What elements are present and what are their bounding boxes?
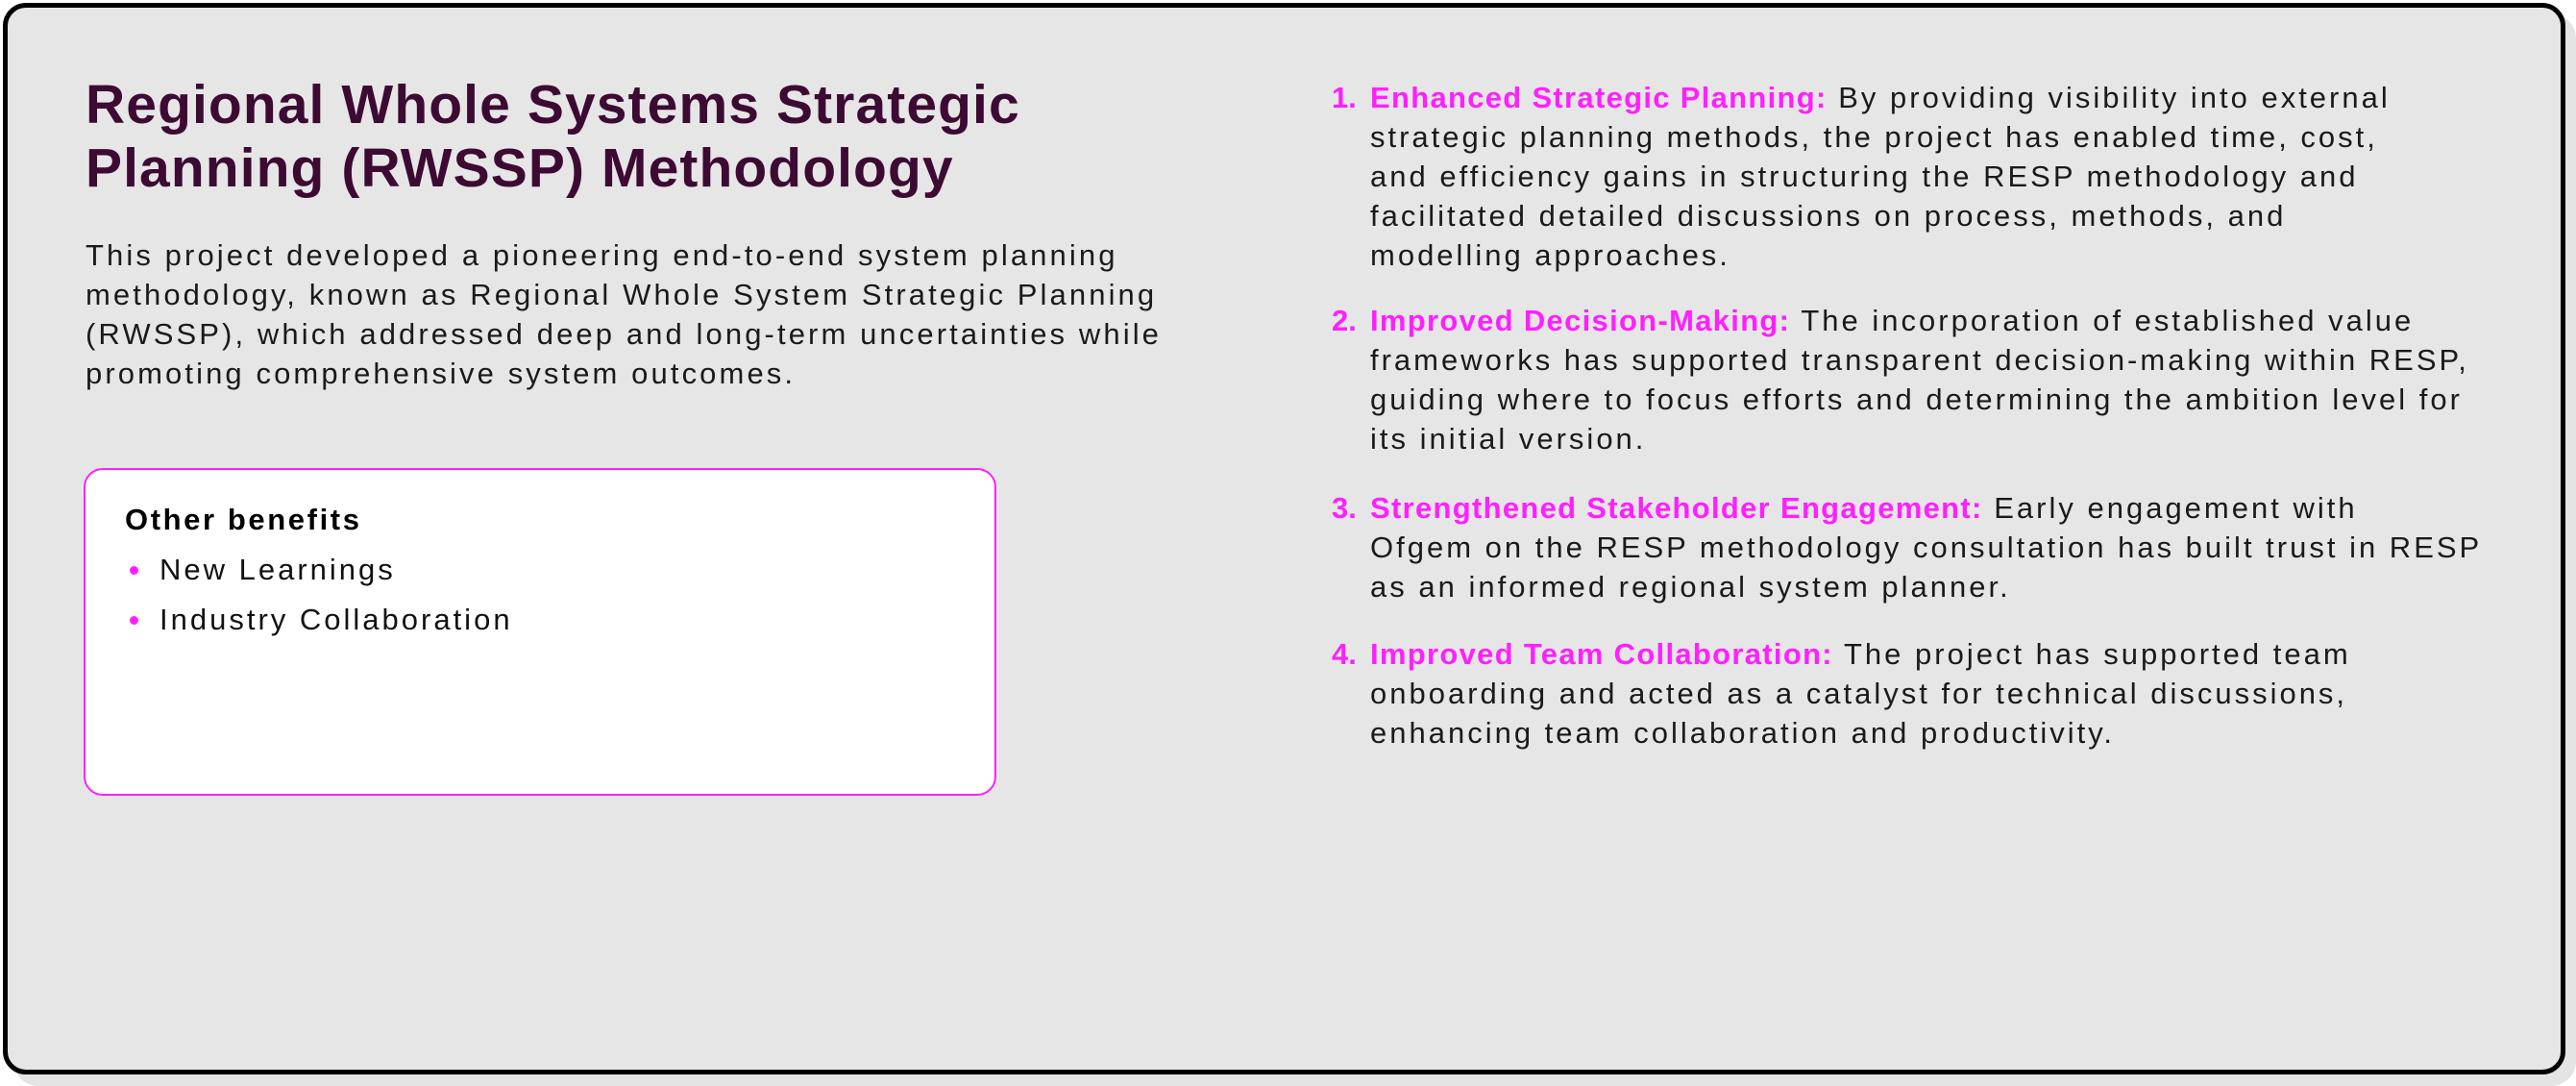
item 3: stakeholder engagement: as an informed regional system planner. (1370, 570, 2011, 604)
benefits list: Industry Collaboration (159, 603, 513, 636)
intro paragraph: promoting comprehensive system outcomes. (86, 357, 796, 390)
item 2: improved decision-making: Improved Decision-Making: The incorporation of established value (1370, 304, 2414, 337)
benefits list (130, 553, 513, 636)
intro paragraph: methodology, known as Regional Whole System Strategic Planning (86, 278, 1157, 311)
item 4: team collaboration: enhancing team collaboration and productivity. (1370, 716, 2115, 750)
item 3: stakeholder engagement: Ofgem on the RESP methodology consultation has built trust in RESP (1370, 531, 2482, 564)
intro paragraph: This project developed a pioneering end-to-end system planning (86, 238, 1118, 272)
item 2: improved decision-making: guiding where to focus efforts and determining the ambition level for (1370, 383, 2463, 416)
item 1: enhanced strategic planning: modelling approaches. (1370, 238, 1730, 272)
item 1: enhanced strategic planning (1332, 81, 2391, 272)
item 2: improved decision-making: frameworks has supported transparent decision-making within RESP, (1370, 343, 2469, 377)
item 2: improved decision-making (1332, 304, 2469, 456)
item 4: team collaboration (1332, 637, 2351, 750)
title: Planning (RWSSP) Methodology (86, 137, 954, 199)
benefits heading: Other benefits (125, 503, 362, 536)
item 3: stakeholder engagement (1332, 491, 2482, 604)
intro paragraph: (RWSSP), which addressed deep and long-term uncertainties while (86, 317, 1162, 351)
title: Regional Whole Systems Strategic (86, 74, 1020, 136)
item 1: enhanced strategic planning: strategic planning methods, the project has enabled time, cost, (1370, 120, 2378, 154)
item 1: enhanced strategic planning: and efficiency gains in structuring the RESP methodology and (1370, 160, 2358, 193)
item 2: improved decision-making: its initial version. (1370, 422, 1646, 456)
item 4: team collaboration: 4. (1332, 637, 1357, 671)
title (86, 74, 1020, 199)
item 4: team collaboration: onboarding and acted as a catalyst for technical discussions, (1370, 677, 2347, 710)
item 1: enhanced strategic planning: 1. (1332, 81, 1357, 114)
item 2: improved decision-making: 2. (1332, 304, 1357, 337)
item 3: stakeholder engagement: 3. (1332, 491, 1357, 525)
item 4: team collaboration: Improved Team Collaboration: The project has supported team (1370, 637, 2351, 671)
item 1: enhanced strategic planning: Enhanced Strategic Planning: By providing visibility into external (1370, 81, 2391, 114)
panel: other benefits (84, 468, 996, 796)
item 1: enhanced strategic planning: facilitated detailed discussions on process, methods, and (1370, 199, 2286, 233)
benefits list: New Learnings (159, 553, 396, 586)
item 3: stakeholder engagement: Strengthened Stakeholder Engagement: Early engagement with (1370, 491, 2358, 525)
intro paragraph (86, 238, 1162, 390)
